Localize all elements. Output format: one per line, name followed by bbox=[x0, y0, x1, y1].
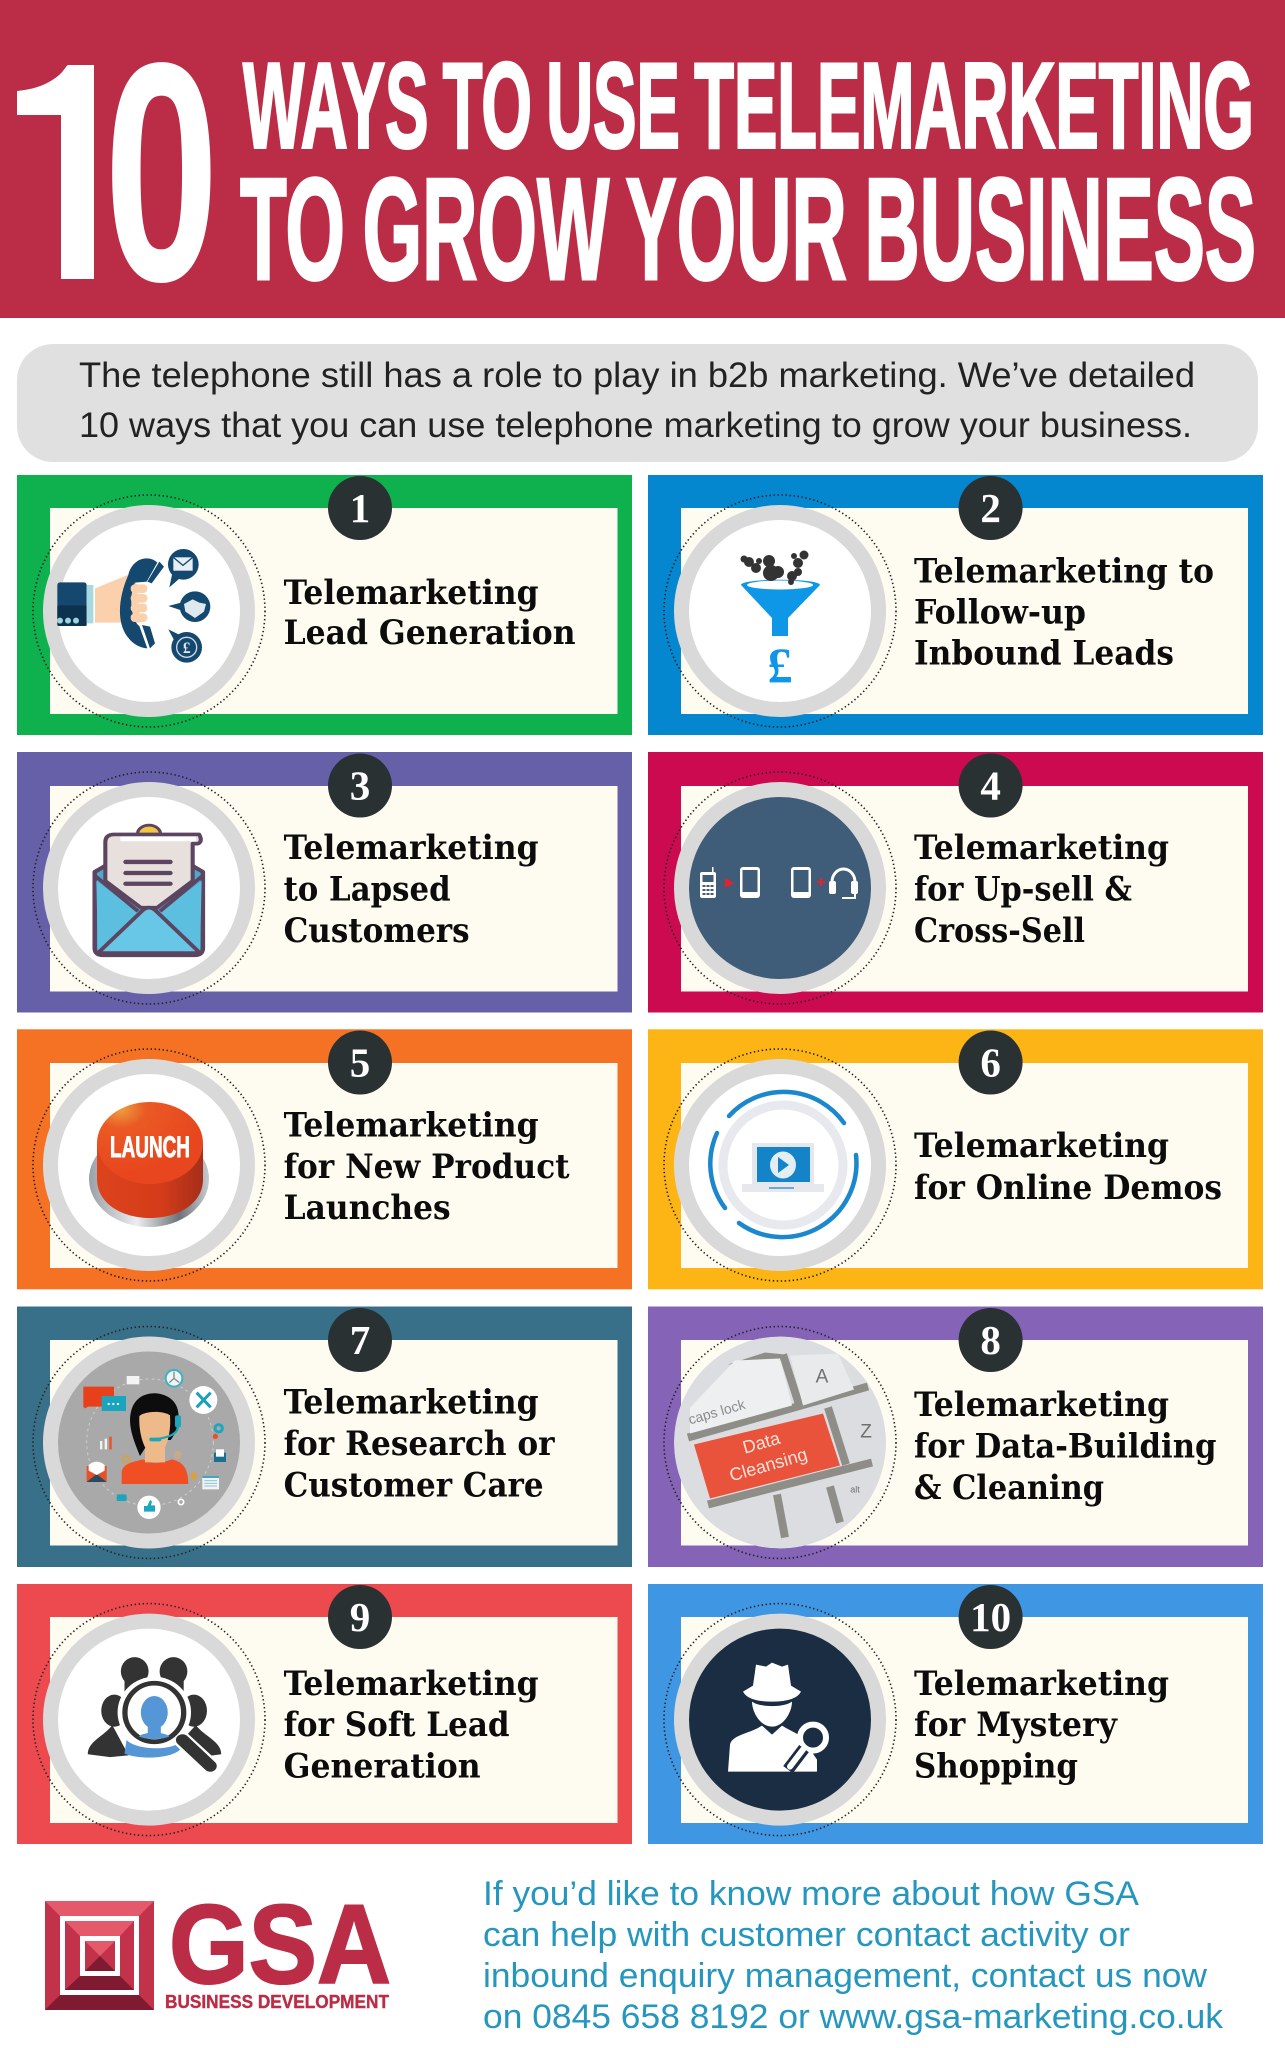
contact text: inbound enquiry management, contact us now bbox=[483, 1957, 1207, 1995]
heading bbox=[284, 1106, 570, 1228]
number badge 6 bbox=[959, 1030, 1023, 1094]
title: big number 10: 0 bbox=[104, 0, 219, 347]
logo mark bbox=[45, 1901, 154, 2010]
heading: & Cleaning bbox=[914, 1468, 1104, 1508]
heading: Shopping bbox=[914, 1746, 1078, 1786]
number badge 7 bbox=[328, 1308, 392, 1372]
heading: for Soft Lead bbox=[284, 1705, 510, 1745]
number badge 9: 9 bbox=[350, 1594, 370, 1640]
key labels bbox=[686, 1366, 872, 1494]
panel: card 1 lead generation bbox=[17, 475, 632, 735]
heading bbox=[284, 573, 576, 653]
heading: Telemarketing to bbox=[914, 552, 1214, 592]
number badge 9 bbox=[328, 1585, 392, 1649]
heading: Lead Generation bbox=[284, 613, 576, 653]
icon: launch button bbox=[33, 1049, 265, 1281]
intro text: 10 ways that you can use telephone marketing to grow your business. bbox=[79, 406, 1192, 445]
heading: for Data-Building bbox=[914, 1426, 1216, 1466]
heading: Customers bbox=[284, 911, 470, 951]
heading: Telemarketing bbox=[284, 1106, 539, 1146]
number badge 3 bbox=[328, 754, 392, 818]
panel: card 3 lapsed customers bbox=[17, 752, 632, 1012]
title: big number 10: 1 bbox=[30, 0, 116, 347]
heading bbox=[914, 1385, 1216, 1508]
panel: card 2 inbound leads bbox=[648, 475, 1263, 735]
heading: for New Product bbox=[284, 1147, 570, 1187]
heading bbox=[914, 552, 1214, 674]
contact text: on 0845 658 8192 or www.gsa-marketing.co.uk bbox=[483, 1998, 1224, 2036]
heading: Telemarketing bbox=[914, 828, 1169, 868]
logo wordmark: GSA bbox=[169, 1882, 391, 2007]
heading bbox=[914, 1126, 1222, 1208]
number badge 5 bbox=[328, 1030, 392, 1094]
number badge 3: 3 bbox=[350, 762, 370, 808]
heading bbox=[284, 1664, 539, 1786]
heading: Telemarketing bbox=[284, 573, 539, 613]
panel: card 10 mystery shopping bbox=[648, 1584, 1263, 1844]
heading: to Lapsed bbox=[284, 870, 451, 910]
panel: card 9 soft lead generation bbox=[17, 1584, 632, 1844]
number badge 1: 1 bbox=[350, 485, 370, 531]
heading: Telemarketing bbox=[914, 1126, 1169, 1166]
number badge 2 bbox=[959, 476, 1023, 540]
heading: Customer Care bbox=[284, 1466, 544, 1506]
heading: Launches bbox=[284, 1188, 451, 1228]
number badge 1 bbox=[328, 476, 392, 540]
number badge 2: 2 bbox=[980, 485, 1001, 531]
panel: card 4 up-sell and cross-sell bbox=[648, 752, 1263, 1012]
heading bbox=[914, 828, 1169, 951]
key labels: alt bbox=[850, 1484, 860, 1494]
icon: detective with magnifier bbox=[664, 1604, 896, 1836]
icon: laptop with video play bbox=[664, 1049, 896, 1281]
number badge 5: 5 bbox=[350, 1040, 370, 1086]
intro panel bbox=[17, 344, 1258, 462]
number badge 4: 4 bbox=[980, 762, 1001, 808]
heading: Generation bbox=[284, 1746, 481, 1786]
heading bbox=[284, 1382, 556, 1506]
contact text: If you’d like to know more about how GSA bbox=[483, 1875, 1139, 1913]
heading bbox=[284, 828, 539, 951]
panel: card 8 data building and cleaning bbox=[648, 1306, 1263, 1567]
icon: funnel with pound sign bbox=[664, 495, 896, 727]
key labels: A bbox=[816, 1366, 829, 1388]
icon: people under magnifying glass bbox=[33, 1604, 265, 1836]
header banner bbox=[0, 0, 1285, 347]
logo tagline: BUSINESS DEVELOPMENT bbox=[165, 1992, 389, 2012]
number badge 8: 8 bbox=[980, 1317, 1001, 1363]
heading: for Online Demos bbox=[914, 1168, 1222, 1208]
heading: Telemarketing bbox=[284, 828, 539, 868]
heading: for Up-sell & bbox=[914, 870, 1132, 910]
intro text: The telephone still has a role to play in b2b marketing. We’ve detailed bbox=[79, 356, 1195, 395]
number badge 10: 10 bbox=[970, 1594, 1011, 1640]
heading: Telemarketing bbox=[914, 1664, 1169, 1704]
heading: Cross-Sell bbox=[914, 911, 1085, 951]
heading: for Mystery bbox=[914, 1705, 1118, 1745]
panel: card 6 online demos bbox=[648, 1029, 1263, 1289]
contact text: can help with customer contact activity or bbox=[483, 1916, 1130, 1954]
key labels: Data bbox=[740, 1428, 783, 1458]
launch label: LAUNCH bbox=[110, 1131, 190, 1164]
number badge 10 bbox=[959, 1585, 1023, 1649]
number badge 4 bbox=[959, 754, 1023, 818]
contact text bbox=[483, 1875, 1224, 2036]
icon: phone with hand and speech bubbles bbox=[33, 495, 265, 727]
GSA logo bbox=[45, 1882, 391, 2012]
heading: Telemarketing bbox=[284, 1382, 539, 1422]
icon: funnel with pound sign: £ bbox=[768, 637, 792, 693]
number badge 8 bbox=[959, 1308, 1023, 1372]
key labels: Z bbox=[860, 1422, 872, 1442]
number badge 7: 7 bbox=[350, 1317, 370, 1363]
icon: phones and headset bbox=[664, 772, 896, 1004]
heading: Telemarketing bbox=[914, 1385, 1169, 1425]
intro text bbox=[79, 356, 1195, 445]
key labels: Cleansing bbox=[727, 1444, 810, 1485]
title: big number 10 bbox=[17, 62, 210, 283]
heading: Follow-up bbox=[914, 592, 1086, 632]
icon: keyboard with data cleansing key bbox=[664, 1326, 896, 1558]
key labels: caps lock bbox=[686, 1396, 748, 1427]
heading: Inbound Leads bbox=[914, 634, 1174, 674]
heading: Telemarketing bbox=[284, 1664, 539, 1704]
heading bbox=[914, 1664, 1169, 1786]
icon: phone with hand and speech bubbles: £ bbox=[183, 640, 191, 657]
icon: envelope with letter bbox=[33, 772, 265, 1004]
heading: for Research or bbox=[284, 1424, 556, 1464]
panel: card 7 research or customer care bbox=[17, 1306, 632, 1567]
icon: call centre agent with surrounding icons bbox=[33, 1326, 265, 1558]
panel: card 5 new product launches bbox=[17, 1029, 632, 1289]
number badge 6: 6 bbox=[980, 1040, 1001, 1086]
